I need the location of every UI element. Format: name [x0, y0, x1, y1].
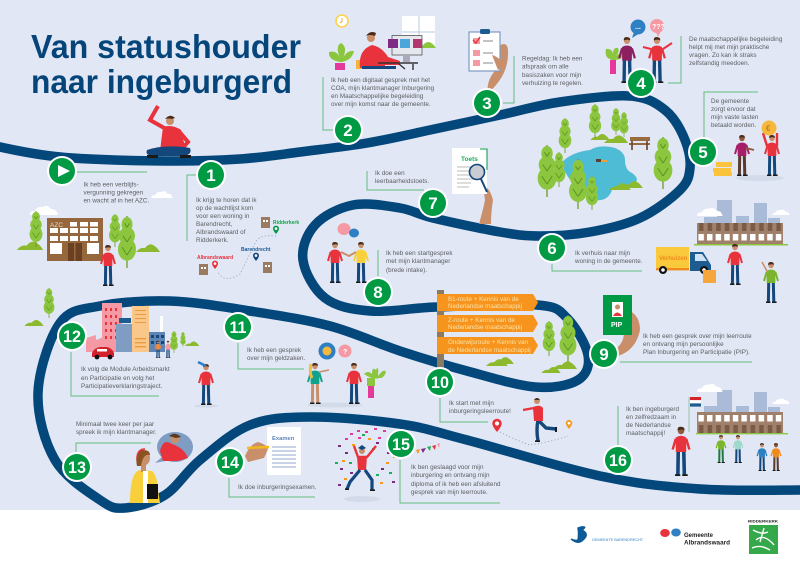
- text 1: Barendrecht,: [196, 221, 233, 228]
- text 6: Ik verhuis naar mijn: [575, 250, 631, 257]
- sign Z: Nederlandse maatschappij: [448, 324, 522, 331]
- step 11: [223, 312, 306, 369]
- step 16 illustration: [673, 384, 789, 476]
- step 15: [386, 429, 501, 503]
- text 3: basiszaken voor mijn: [522, 72, 582, 79]
- step 12: [57, 321, 170, 396]
- sign B1: [437, 294, 538, 311]
- step 4 illustration: [606, 19, 672, 83]
- step 9: [589, 333, 752, 369]
- map with municipalities: Ridderkerk: [273, 220, 299, 226]
- step 9 PIP card: [603, 295, 640, 356]
- step 15 illustration celebration: [335, 428, 396, 502]
- start text: en wacht af in het AZC.: [84, 198, 150, 204]
- text 2: en Maatschappelijke begeleiding: [331, 93, 424, 100]
- text 15: inburgering en ontvang mijn: [411, 472, 490, 479]
- badge 5: 5: [698, 143, 708, 162]
- moving truck: Verhuizen: [659, 256, 688, 262]
- badge 13: 13: [68, 458, 86, 477]
- park with lake: [538, 104, 672, 210]
- badge 6: 6: [547, 239, 557, 258]
- step 2: [323, 77, 435, 145]
- step 6 illustration: neighbourhood: [694, 200, 789, 246]
- logo Ridderkerk: [748, 520, 778, 554]
- loop trees: [486, 315, 577, 373]
- logo Albrandswaard: Gemeente: [684, 533, 714, 539]
- step 14 illustration exam: [245, 427, 301, 475]
- step 6: [537, 233, 643, 271]
- text 1: Ridderkerk.: [196, 237, 229, 244]
- badge 14: 14: [221, 453, 240, 472]
- signpost routes: [437, 290, 538, 372]
- text 15: Ik ben geslaagd voor mijn: [411, 464, 484, 471]
- step 7: [367, 170, 448, 218]
- sign Z: [437, 315, 538, 332]
- logo Albrandswaard: [660, 528, 730, 546]
- logo Barendrecht: GEMEENTE BARENDRECHT: [592, 537, 644, 542]
- moving truck: [656, 247, 716, 283]
- text 9: Ik heb een gesprek over mijn leerroute: [643, 333, 752, 340]
- step 5 illustration: €: [766, 124, 771, 133]
- step 10: [425, 367, 511, 422]
- text 4: helpt mij met mijn praktische: [689, 44, 770, 51]
- text 12: Participatieverklaringstraject.: [81, 383, 163, 390]
- badge 12: 12: [63, 327, 81, 346]
- start text: vergunning gekregen: [84, 190, 144, 196]
- step 16: [603, 406, 680, 475]
- step 11 illustration: ?: [343, 349, 347, 356]
- text 4: zelfstandig meedoen.: [689, 60, 750, 67]
- text 8: (brede intake).: [386, 267, 427, 274]
- sign Z: Z-route + Kennis van de: [448, 317, 515, 324]
- road: [0, 96, 800, 508]
- step 7 illustration: Toets: [461, 156, 478, 163]
- badge 4: 4: [636, 74, 646, 93]
- text 7: leerbaarheidstoets.: [375, 178, 429, 185]
- text 7: Ik doe een: [375, 170, 405, 177]
- text 1: voor een woning in: [196, 213, 250, 220]
- AZC scene: AZC: [50, 222, 63, 229]
- badge 9: [589, 339, 619, 369]
- text 16: de Nederlandse: [626, 422, 671, 429]
- text 10: Ik start met mijn: [449, 400, 494, 407]
- logo Albrandswaard: Albrandswaard: [684, 540, 730, 546]
- text 12: en Participatie en volg het: [81, 375, 154, 382]
- text 11: Ik heb een gesprek: [247, 347, 302, 354]
- text 3: afspraak om alle: [522, 64, 569, 70]
- sign onderwijs: de Nederlandse maatschappij: [448, 347, 531, 354]
- step 14 illustration exam: Examen: [272, 436, 295, 442]
- footer band: [0, 510, 800, 566]
- map with municipalities: Albrandswaard: [197, 255, 233, 261]
- title: Van statushouder: [31, 28, 301, 65]
- step 5 illustration: [713, 120, 784, 181]
- bunting: [416, 443, 440, 454]
- step 5: [688, 92, 759, 167]
- text 5: zorgt ervoor dat: [711, 106, 756, 113]
- text 16: Ik ben ingeburgerd: [626, 406, 680, 413]
- text 15: gesprek van mijn leerroute.: [411, 489, 488, 496]
- logo Ridderkerk: RIDDERKERK: [748, 520, 778, 524]
- sign onderwijs: [437, 337, 538, 354]
- text 13: Minimaal twee keer per jaar: [76, 421, 154, 428]
- text 10: inburgeringsleerroute!: [449, 408, 511, 415]
- map with municipalities: [197, 217, 299, 279]
- text 4: De maatschappelijke begeleiding: [689, 36, 783, 43]
- step 14: [215, 447, 317, 497]
- people waving: [728, 244, 778, 303]
- text 8: met mijn klantmanager: [386, 258, 450, 265]
- text 9: en ontvang mijn persoonlijke: [643, 341, 724, 348]
- text 5: betaald worden.: [711, 122, 756, 129]
- sign B1: B1-route + Kennis van de: [448, 296, 519, 303]
- text 1: op de wachtlijst kom: [196, 205, 253, 212]
- step 3: [472, 56, 583, 118]
- start text: Ik heb een verblijfs-: [84, 182, 139, 188]
- step 3 illustration: [469, 29, 508, 94]
- text 8: Ik heb een startgesprek: [386, 250, 453, 257]
- step 4: [626, 36, 783, 98]
- play badge: [47, 156, 77, 186]
- text 5: mijn vaste lasten: [711, 114, 759, 121]
- step 8 illustration: [328, 223, 368, 283]
- step 4 illustration: ???: [652, 24, 665, 31]
- text 2: over mijn komst naar de gemeente.: [331, 101, 431, 108]
- step 13 illustration: [130, 432, 193, 503]
- badge 2: 2: [343, 121, 353, 140]
- text 2: Ik heb een digitaal gesprek met het: [331, 77, 430, 84]
- text 1: Albrandswaard of: [196, 229, 246, 236]
- start panel: [47, 156, 150, 204]
- map with municipalities: Barendrecht: [241, 247, 271, 253]
- badge 3: 3: [482, 94, 492, 113]
- badge 8: 8: [373, 283, 383, 302]
- text 11: over mijn geldzaken.: [247, 355, 306, 362]
- tree near loop: [24, 288, 54, 326]
- text 9: Plan Inburgering en Participatie (PIP).: [643, 349, 750, 356]
- badge 11: 11: [230, 318, 246, 337]
- badge 15: 15: [392, 435, 410, 454]
- text 6: woning in de gemeente.: [574, 258, 643, 265]
- text 12: Ik volg de Module Arbeidsmarkt: [81, 366, 170, 373]
- AZC scene: [17, 191, 172, 286]
- title: naar ingeburgerd: [31, 63, 292, 100]
- text 3: verhuizing te regelen.: [522, 80, 583, 87]
- text 1: Ik krijg te horen dat ik: [196, 197, 257, 204]
- badge 4: [626, 68, 656, 98]
- step 9 PIP card: PIP: [611, 322, 623, 329]
- badge 10: 10: [431, 373, 449, 392]
- text 14: Ik doe inburgeringsexamen.: [238, 484, 317, 491]
- badge 9: 9: [599, 345, 609, 364]
- step 11 illustration: [307, 342, 386, 408]
- text 15: diploma of ik heb een afsluitend: [411, 481, 501, 488]
- text 4: vragen. Zo kan ik straks: [689, 52, 757, 59]
- step 12 illustration city: [86, 303, 199, 359]
- text 5: De gemeente: [711, 98, 750, 105]
- sitting man: [147, 106, 191, 158]
- step 2 illustration: [329, 15, 436, 70]
- step 8: [363, 250, 453, 307]
- step 4 illustration: ...: [635, 24, 641, 31]
- sign B1: Nederlandse maatschappij: [448, 303, 522, 310]
- badge 16: 16: [609, 451, 627, 470]
- text 16: en zelfredzaam in: [626, 414, 677, 421]
- step 7 illustration: [452, 148, 493, 224]
- text 3: Regeldag: Ik heb een: [522, 56, 583, 62]
- logo Barendrecht: [571, 527, 644, 542]
- badge 1: 1: [206, 166, 216, 185]
- step 10 illustration runner: [492, 398, 572, 445]
- text 2: COA, mijn klantmanager Inburgering: [331, 85, 435, 92]
- text 16: maatschappij!: [626, 430, 665, 437]
- sign onderwijs: Onderwijsroute + Kennis van: [448, 339, 529, 346]
- step 1: [187, 160, 257, 244]
- badge 7: 7: [428, 194, 438, 213]
- text 13: spreek ik mijn klantmanager.: [76, 429, 157, 436]
- step 12 telescope man: [194, 362, 218, 408]
- step 13: [62, 421, 157, 482]
